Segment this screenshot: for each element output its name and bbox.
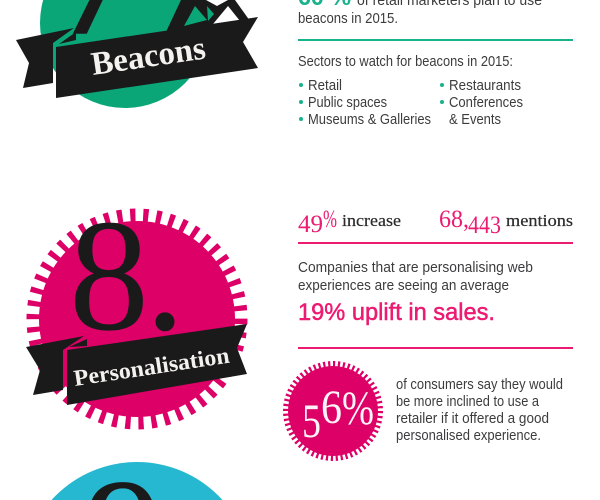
list: sectors right column: Conferences <box>449 94 523 111</box>
ribbon label: Beacons: Beacons <box>89 30 208 83</box>
ribbon: back tail <box>26 336 84 395</box>
badge: 56% <box>286 364 380 458</box>
text block: consumers: retailer if it offered a good <box>396 410 549 427</box>
text block: personalisation uplift <box>298 259 533 326</box>
ribbon: back tail <box>16 28 74 88</box>
badge: 56%: % <box>342 382 374 435</box>
text block: beacons statistic: beacons in 2015. <box>298 10 398 27</box>
list: sectors left column: Museums & Galleries <box>308 111 431 128</box>
badge: 56%: 5 <box>302 395 321 448</box>
stats: increase and mentions: 443 <box>468 212 501 239</box>
list: sectors right column: & Events <box>449 111 501 128</box>
list: sectors left column: Retail <box>308 77 342 94</box>
stats: increase and mentions: increase <box>342 211 401 230</box>
stats: increase and mentions: 68, <box>439 206 469 233</box>
pink sunburst circle <box>33 215 241 423</box>
text block: sectors to watch <box>298 53 523 128</box>
text block: personalisation uplift: 19% uplift in sales. <box>298 299 495 326</box>
list: sectors right column <box>440 77 523 128</box>
text block: consumers: of consumers say they would <box>396 376 563 393</box>
ribbon: fold <box>69 339 87 347</box>
text block: personalisation uplift: Companies that are personalising web <box>298 259 533 276</box>
stats: increase and mentions <box>298 206 573 239</box>
text block: beacons statistic <box>298 0 542 27</box>
ribbon: front band <box>67 324 247 405</box>
text block: consumers <box>396 376 563 444</box>
badge: 8 Personalisation <box>26 186 247 423</box>
badge: 9 <box>22 445 252 500</box>
ribbon: front band <box>56 17 258 98</box>
text block: personalisation uplift: experiences are seeing an average <box>298 277 509 294</box>
green circle <box>40 0 210 108</box>
list: sectors left column <box>299 77 431 128</box>
text block: sectors to watch: Sectors to watch for beacons in 2015: <box>298 53 513 70</box>
badge: 56%: 6 <box>321 381 342 434</box>
ribbon: fold <box>59 32 76 44</box>
list: sectors right column: Restaurants <box>449 77 521 94</box>
number 8.: 8. <box>69 186 185 364</box>
icon: beacon tower <box>165 0 250 34</box>
stats: increase and mentions: mentions <box>506 211 573 230</box>
list: sectors left column: Public spaces <box>308 94 387 111</box>
ribbon label: Personalisation: Personalisation <box>72 343 231 391</box>
text block: consumers: personalised experience. <box>396 427 541 444</box>
badge: 7 Beacons <box>16 0 258 108</box>
stats: increase and mentions: 49 <box>298 211 323 238</box>
stats: increase and mentions: % <box>323 206 337 233</box>
text block: consumers: be more inclined to use a <box>396 393 540 410</box>
